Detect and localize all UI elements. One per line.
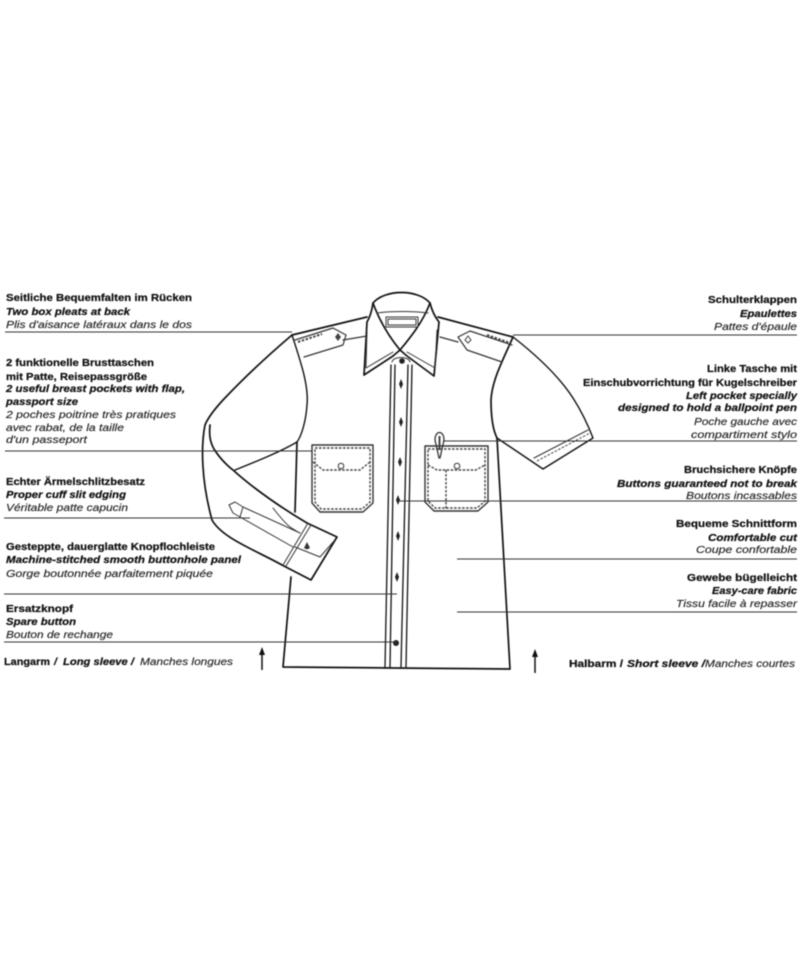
label: short sleeve: Halbarm / bbox=[569, 658, 623, 670]
collar bbox=[364, 292, 439, 376]
cuff bbox=[282, 523, 337, 580]
label: buttons bbox=[617, 464, 798, 502]
label: buttons: Buttons guaranteed not to break bbox=[617, 478, 798, 490]
right epaulette bbox=[440, 331, 512, 362]
label: epaulettes bbox=[708, 294, 797, 333]
label: buttons: Boutons incassables bbox=[686, 490, 798, 502]
label: buttonhole panel bbox=[6, 541, 242, 580]
right breast pocket with pen bbox=[425, 432, 488, 511]
left labels bbox=[4, 292, 242, 668]
label: breast pockets: avec rabat, de la taille bbox=[6, 422, 124, 434]
buttons bbox=[393, 358, 405, 646]
long sleeve bbox=[203, 335, 307, 565]
left epaulette bbox=[295, 328, 367, 357]
label: long sleeve: Langarm bbox=[4, 656, 50, 668]
label: left pocket: designed to hold a ballpoint pen bbox=[618, 402, 797, 414]
label: epaulettes: Schulterklappen bbox=[708, 294, 797, 306]
label: breast pockets: passport size bbox=[5, 396, 78, 408]
label: comfortable cut: Bequeme Schnittform bbox=[676, 518, 797, 530]
arrow: long sleeve bbox=[259, 647, 265, 670]
label: buttonhole panel: Gesteppte, dauerglatte Knopflochleiste bbox=[6, 541, 215, 553]
label: box pleats: Two box pleats at back bbox=[6, 306, 131, 318]
label: comfortable cut: Coupe confortable bbox=[696, 544, 797, 556]
button placket bbox=[385, 365, 412, 667]
label: short sleeve: Manches courtes bbox=[705, 658, 796, 670]
label: short sleeve bbox=[569, 658, 796, 670]
label: comfortable cut: Comfortable cut bbox=[708, 532, 798, 544]
label: easy-care fabric: Tissu facile à repasser bbox=[676, 598, 798, 610]
label: buttonhole panel: Machine-stitched smooth buttonhole panel bbox=[6, 554, 242, 566]
label: left pocket: Left pocket specially bbox=[686, 390, 798, 402]
shirt body bbox=[235, 317, 513, 669]
label: buttonhole panel: Gorge boutonnée parfaitement piquée bbox=[6, 568, 213, 580]
label: breast pockets: 2 poches poitrine très pratiques bbox=[5, 409, 177, 421]
label: buttons: Bruchsichere Knöpfe bbox=[684, 464, 797, 476]
label: cuff slit: Echter Ärmelschlitzbesatz bbox=[6, 475, 145, 488]
label: spare button: Bouton de rechange bbox=[6, 629, 113, 641]
label: left pocket: Linke Tasche mit bbox=[707, 363, 798, 375]
label: breast pockets: d'un passeport bbox=[6, 434, 88, 446]
label: left pocket bbox=[583, 363, 798, 441]
label: comfortable cut bbox=[676, 518, 798, 556]
label: easy-care fabric bbox=[676, 572, 798, 610]
label: left pocket: compartiment stylo bbox=[691, 429, 797, 441]
label: epaulettes: Pattes d'épaule bbox=[714, 321, 797, 333]
label: breast pockets: 2 funktionelle Brusttaschen bbox=[6, 357, 154, 369]
short sleeve bbox=[497, 337, 593, 469]
leader lines bbox=[4, 332, 797, 642]
label: breast pockets: mit Patte, Reisepassgröße bbox=[6, 371, 147, 383]
label: spare button bbox=[6, 603, 113, 641]
label: cuff slit: Véritable patte capucin bbox=[6, 502, 128, 514]
label: short sleeve: Short sleeve / bbox=[627, 658, 706, 670]
label: breast pockets bbox=[5, 357, 185, 446]
label: left pocket: Einschubvorrichtung für Kugelschreiber bbox=[583, 377, 797, 389]
label: easy-care fabric: Gewebe bügelleicht bbox=[687, 572, 798, 584]
cuff slit placket bbox=[229, 502, 300, 547]
label: box pleats: Seitliche Bequemfalten im Rücken bbox=[6, 292, 192, 304]
shirt illustration bbox=[203, 292, 593, 669]
label: long sleeve: Manches longues bbox=[140, 656, 234, 668]
left breast pocket bbox=[312, 445, 373, 512]
arrow: short sleeve bbox=[532, 649, 538, 673]
label: epaulettes: Epaulettes bbox=[740, 308, 797, 320]
label: long sleeve: / bbox=[53, 656, 58, 668]
right labels bbox=[569, 294, 798, 670]
label: box pleats: Plis d'aisance latéraux dans le dos bbox=[6, 319, 193, 331]
label: easy-care fabric: Easy-care fabric bbox=[712, 585, 797, 597]
label: long sleeve: Long sleeve / bbox=[63, 656, 135, 668]
label: spare button: Ersatzknopf bbox=[6, 603, 74, 615]
label: long sleeve bbox=[4, 656, 234, 668]
label: breast pockets: 2 useful breast pockets with flap, bbox=[5, 383, 185, 395]
label: cuff slit bbox=[6, 475, 145, 514]
label: spare button: Spare button bbox=[6, 616, 76, 628]
label: box pleats bbox=[6, 292, 193, 331]
label: left pocket: Poche gauche avec bbox=[694, 416, 798, 428]
label: cuff slit: Proper cuff slit edging bbox=[6, 489, 127, 501]
